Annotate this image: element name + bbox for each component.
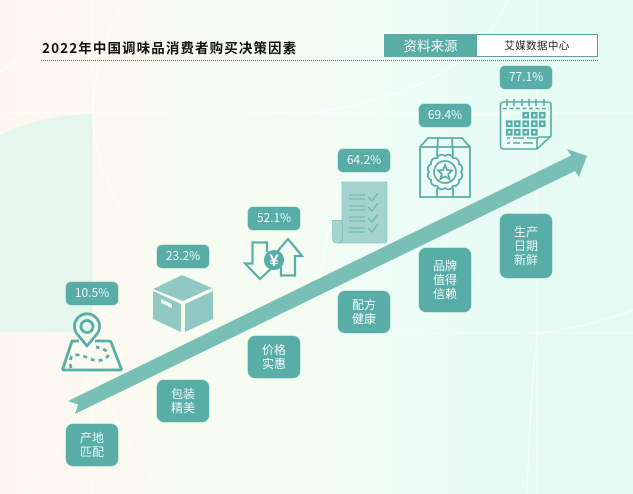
icon: package with seal (419, 137, 471, 198)
icon: price arrows with yen (242, 237, 304, 280)
title: 2022年中国调味品消费者购买决策因素 (42, 37, 297, 57)
label: 品牌值得信赖: 信赖 (433, 285, 457, 302)
label: 品牌值得信赖 (419, 248, 471, 312)
value: 配方健康 (338, 149, 390, 172)
label: 配方健康: 健康 (352, 310, 376, 327)
value: 包装精美 (157, 245, 209, 268)
label: 产地匹配: 产地 (80, 429, 104, 446)
label: 品牌值得信赖: 品牌 (433, 257, 457, 274)
value: 生产日期新鲜: 77.1% (509, 68, 543, 85)
source label: 资料来源 (404, 35, 458, 55)
source name: 艾媒数据中心 (504, 38, 570, 53)
icon: map pin (61, 312, 123, 372)
source name (476, 34, 598, 57)
icon: checklist scroll (332, 182, 388, 244)
label: 生产日期新鲜: 生产 (514, 223, 538, 240)
label: 生产日期新鲜: 日期 (514, 237, 538, 254)
value: 生产日期新鲜 (500, 66, 552, 89)
label: 包装精美 (157, 380, 209, 422)
label: 品牌值得信赖: 值得 (433, 271, 457, 288)
value: 包装精美: 23.2% (166, 247, 200, 264)
value: 配方健康: 64.2% (347, 151, 381, 168)
value: 价格实惠 (248, 207, 300, 230)
label: 产地匹配 (66, 424, 118, 466)
label: 配方健康 (338, 291, 390, 333)
label: 产地匹配: 匹配 (80, 443, 104, 460)
value: 品牌值得信赖 (419, 104, 471, 127)
value: 产地匹配 (66, 282, 118, 305)
yen sign: ¥ (269, 251, 279, 270)
label: 价格实惠 (248, 336, 300, 378)
value: 价格实惠: 52.1% (257, 209, 291, 226)
label: 生产日期新鲜: 新鲜 (514, 251, 538, 268)
label: 包装精美: 包装 (171, 385, 195, 402)
source box (384, 34, 598, 57)
label: 价格实惠: 价格 (262, 341, 286, 358)
label: 配方健康: 配方 (352, 296, 376, 313)
label: 价格实惠: 实惠 (262, 355, 286, 372)
value: 品牌值得信赖: 69.4% (428, 106, 462, 123)
label: 包装精美: 精美 (171, 399, 195, 416)
label: 生产日期新鲜 (500, 214, 552, 278)
source label (384, 34, 477, 57)
icon: box (153, 275, 213, 332)
value: 产地匹配: 10.5% (75, 284, 109, 301)
icon: calendar (500, 99, 552, 150)
